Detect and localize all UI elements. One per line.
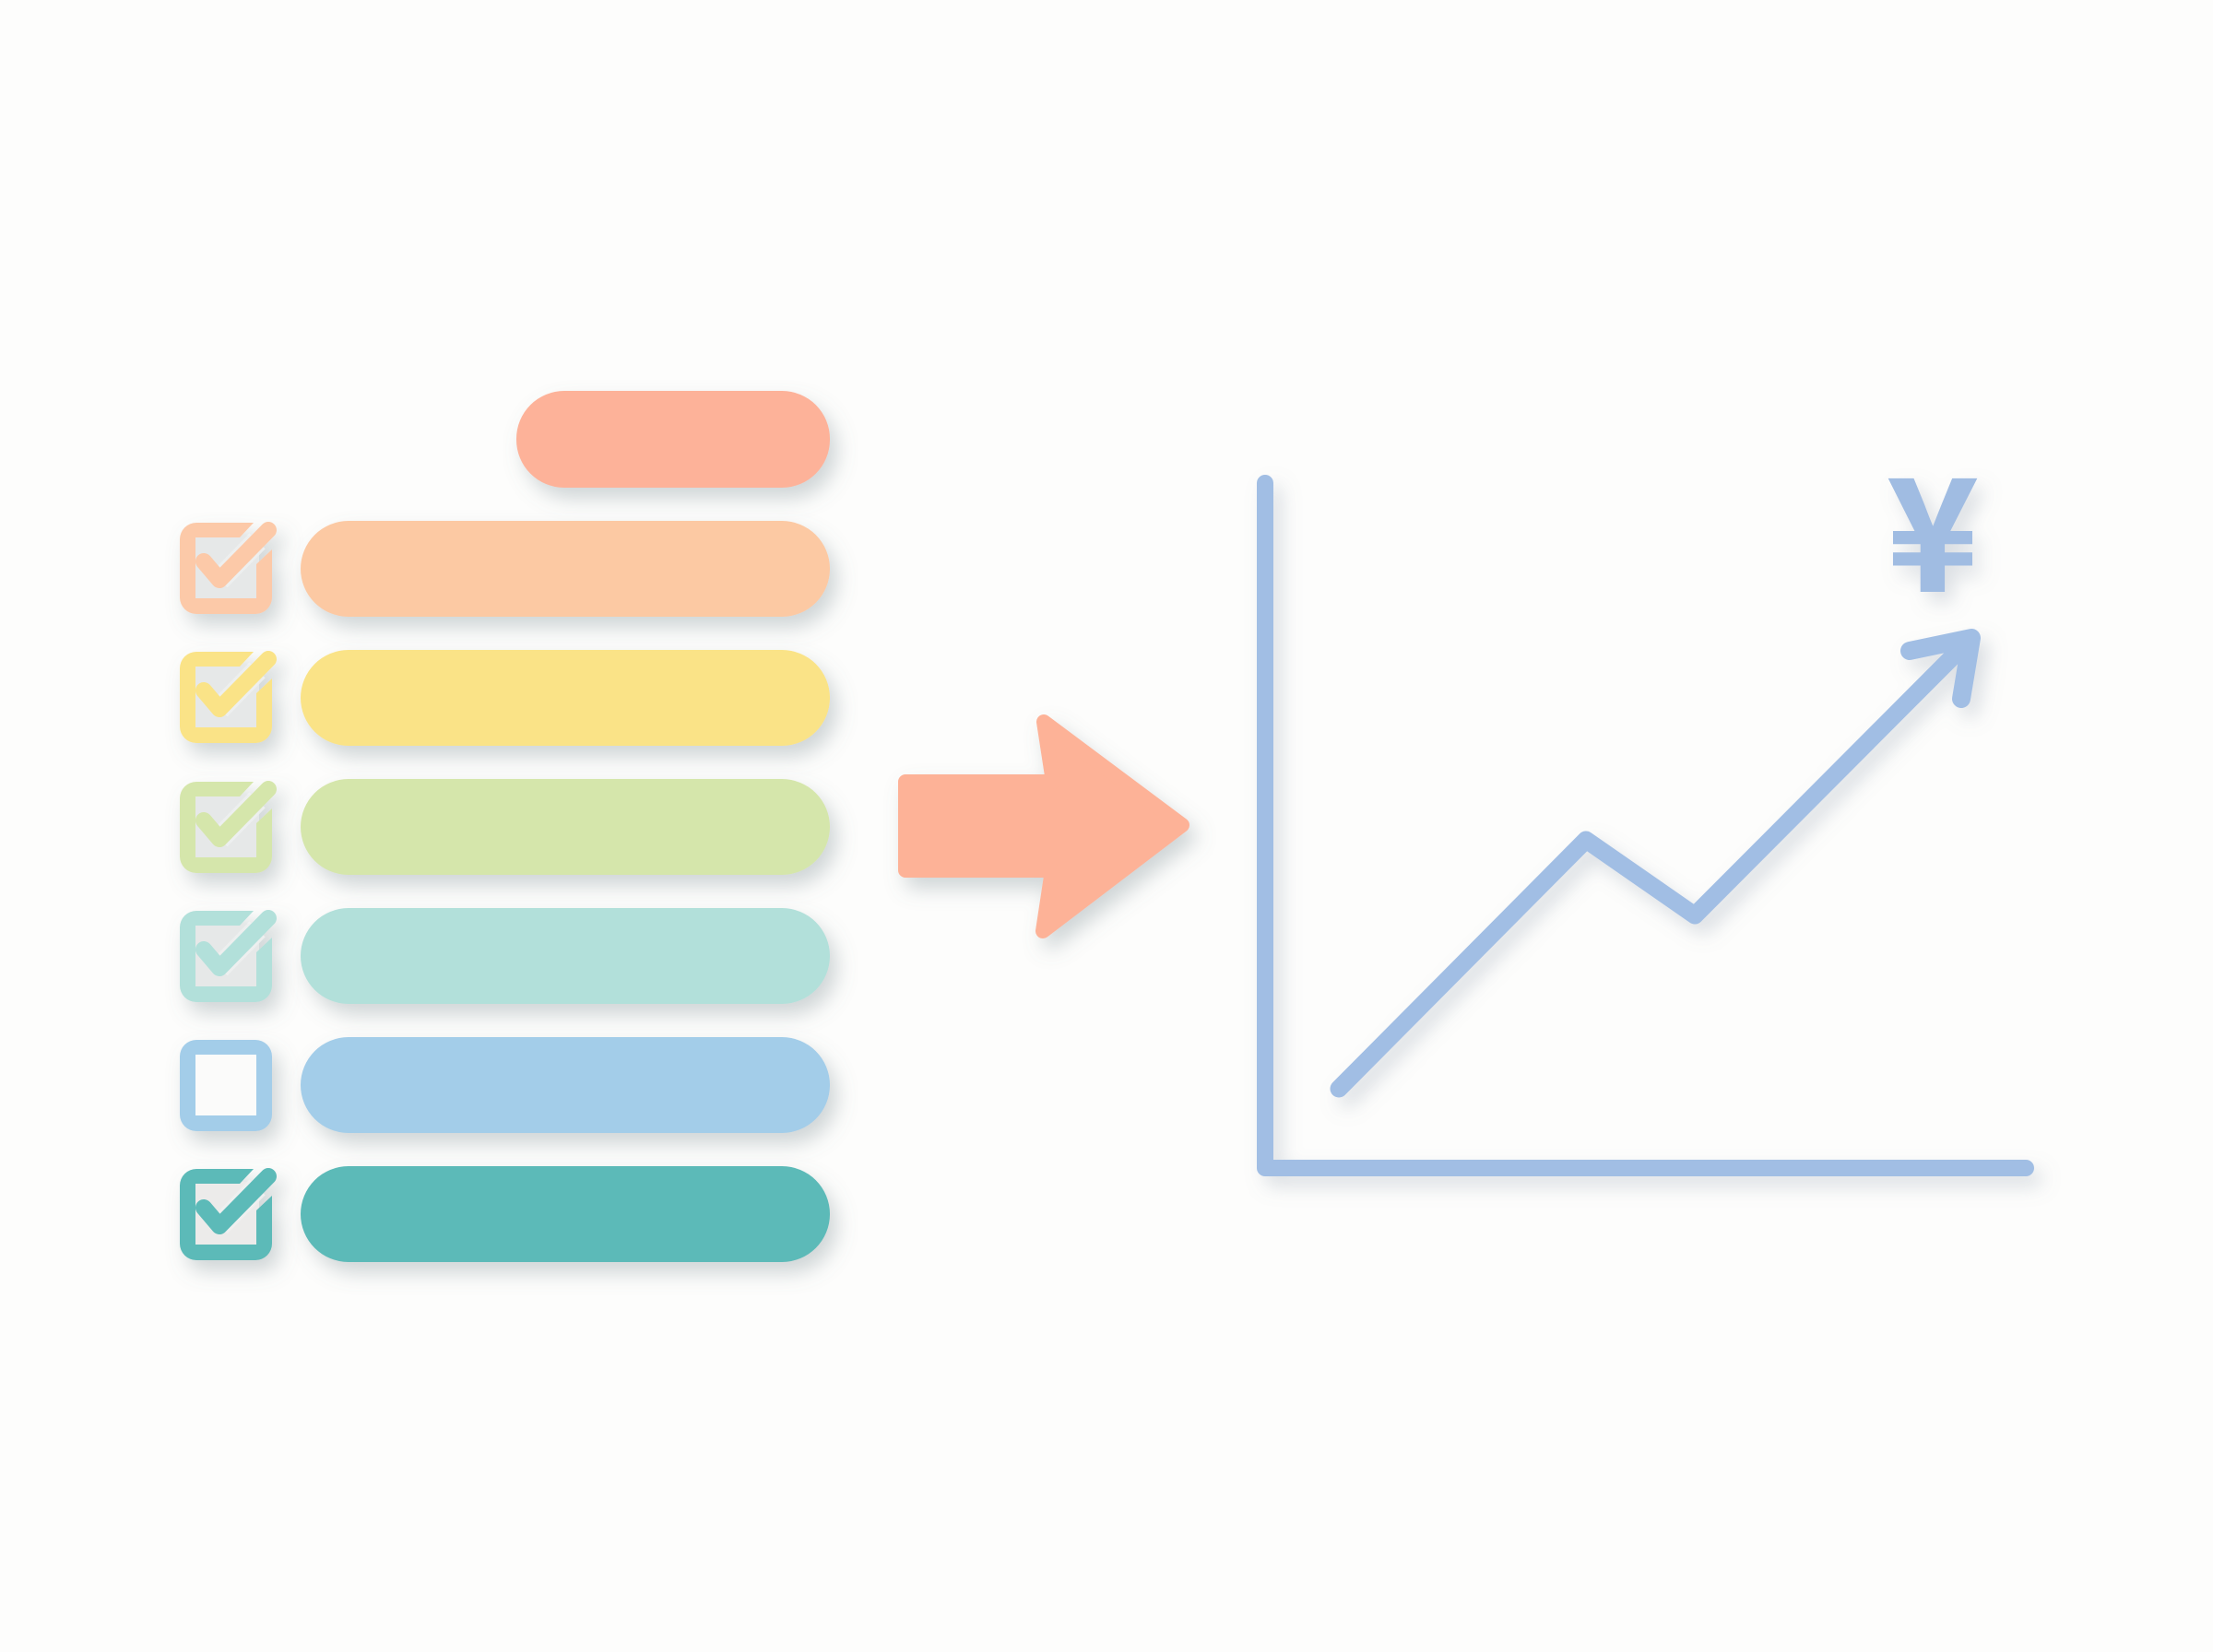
row 4: aqua checkbox — [180, 911, 272, 1002]
row 6: teal bar — [301, 1166, 830, 1262]
arrow: checklist leads to growth — [905, 722, 1182, 931]
row 2: yellow bar — [301, 650, 830, 746]
row 5: blue empty checkbox — [180, 1040, 272, 1131]
row 1: peach bar — [301, 521, 830, 617]
row 4: aqua bar — [301, 908, 830, 1004]
panel: checklist — [180, 391, 830, 1262]
chart axes — [1265, 483, 2026, 1168]
row 2: yellow checkbox — [180, 652, 272, 743]
row 3: green bar — [301, 779, 830, 875]
row 5: blue bar — [301, 1037, 830, 1133]
rising trend line with arrowhead — [1339, 638, 1971, 1089]
row 1: peach checkbox — [180, 523, 272, 614]
top header pill — [516, 391, 830, 488]
row 3: green checkbox — [180, 782, 272, 873]
icon: yen symbol: ¥ — [1887, 412, 1979, 636]
panel: growth chart — [1265, 412, 2026, 1168]
row 6: teal checked checkbox — [180, 1169, 272, 1260]
